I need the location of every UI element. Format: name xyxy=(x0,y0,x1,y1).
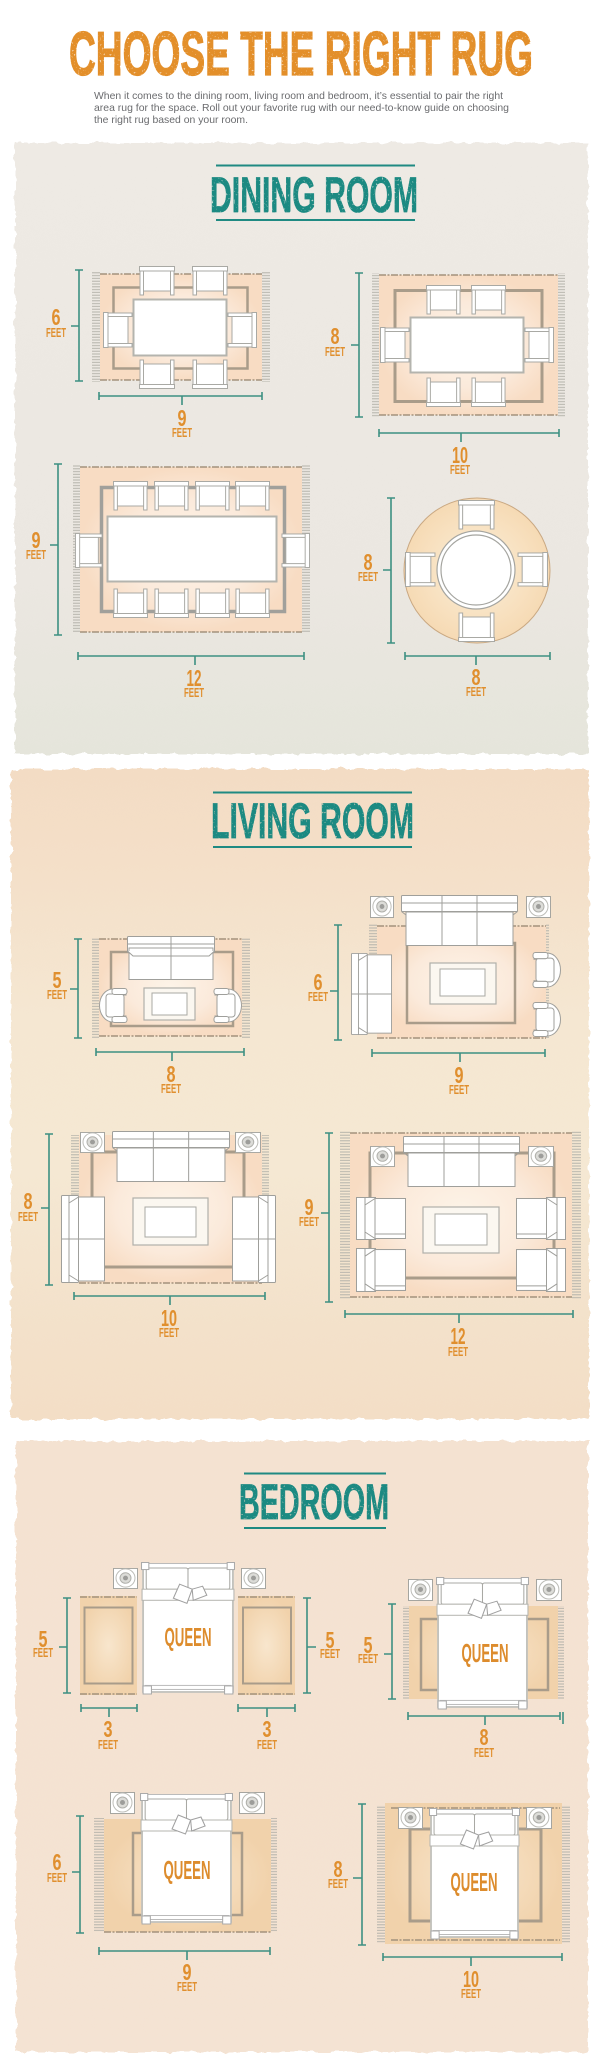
furniture xyxy=(62,1132,276,1282)
table and chairs xyxy=(104,266,256,388)
right width dimension: 3 feet xyxy=(238,1704,295,1752)
nightstands xyxy=(408,1580,561,1600)
rug xyxy=(92,272,270,382)
intro text xyxy=(94,91,509,126)
intro text: area rug for the space. Roll out your favorite rug with our need-to-know guide on choosing xyxy=(94,103,509,114)
rug xyxy=(340,1131,581,1299)
width dimension: 12 feet: 12 xyxy=(450,1323,466,1349)
height dimension: 8 feet: FEET xyxy=(325,345,345,359)
left width dimension: 3 feet xyxy=(81,1704,137,1752)
width dimension: 9 feet xyxy=(99,1947,270,1994)
height dimension: 8 feet: 8 xyxy=(364,549,373,575)
table and chairs xyxy=(380,286,554,406)
diagram: 5 by 8 living room rug xyxy=(47,936,250,1096)
height dimension: 5 feet xyxy=(358,1604,396,1699)
width dimension: 10 feet: 10 xyxy=(161,1305,177,1331)
width dimension: 10 feet: FEET xyxy=(450,463,470,477)
height dimension: 5 feet: 5 xyxy=(364,1632,373,1658)
rug xyxy=(94,1818,277,1932)
width dimension: 10 feet: 10 xyxy=(463,1966,479,1992)
width dimension: 9 feet: 9 xyxy=(454,1062,464,1088)
height dimension: 8 feet xyxy=(358,498,395,643)
width dimension: 10 feet: FEET xyxy=(159,1326,179,1340)
height dimension: 8 feet: 8 xyxy=(334,1856,343,1882)
height dimension: 6 feet: 6 xyxy=(314,969,322,995)
width dimension: 9 feet: 9 xyxy=(182,1959,192,1985)
rug xyxy=(73,465,310,633)
nightstands xyxy=(110,1792,264,1814)
diagram: bed with 8 by 10 rug xyxy=(328,1803,570,2001)
diagram: 8 by 10 living room rug xyxy=(18,1132,276,1340)
rug xyxy=(369,924,549,1038)
queen bed xyxy=(437,1578,528,1709)
width dimension: 10 feet xyxy=(379,429,559,477)
left width dimension: 3 feet: FEET xyxy=(98,1738,118,1752)
height dimension: 5 feet: 5 xyxy=(52,967,62,993)
nightstands xyxy=(398,1808,551,1828)
width dimension: 10 feet: 10 xyxy=(452,442,468,468)
width dimension: 12 feet xyxy=(78,652,304,700)
height dimension: 6 feet xyxy=(47,1816,84,1933)
width dimension: 9 feet: FEET xyxy=(172,426,192,440)
intro text: When it comes to the dining room, living room and bedroom, it’s essential to pair the right xyxy=(94,91,503,102)
right runner rug xyxy=(238,1596,295,1695)
queen bed xyxy=(142,1563,234,1694)
rug xyxy=(92,938,250,1038)
width dimension: 10 feet xyxy=(383,1953,562,2001)
queen bed: QUEEN xyxy=(164,1855,210,1885)
height dimension: 5 feet: FEET xyxy=(358,1652,378,1666)
furniture xyxy=(356,1136,566,1291)
heading: dining room: DINING ROOM xyxy=(210,167,418,223)
heading: bedroom: BEDROOM xyxy=(239,1474,389,1530)
diagram: 9 by 12 dining rug xyxy=(26,464,310,700)
right width dimension: 3 feet: 3 xyxy=(262,1716,272,1742)
height dimension: 8 feet: 8 xyxy=(24,1188,33,1214)
rug xyxy=(372,273,565,417)
height dimension: 6 feet: 6 xyxy=(52,1849,62,1875)
height dimension: 9 feet xyxy=(26,464,62,635)
height dimension: 9 feet xyxy=(299,1133,333,1302)
queen bed: QUEEN xyxy=(164,1622,212,1652)
panel: living room background xyxy=(11,769,589,1419)
width dimension: 10 feet xyxy=(74,1292,265,1340)
height dimension: 6 feet xyxy=(46,270,83,381)
left runner rug xyxy=(80,1596,137,1695)
height dimension: 5 feet xyxy=(47,939,82,1038)
height dimension: 8 feet: FEET xyxy=(358,570,378,584)
left height dimension: 5 feet: 5 xyxy=(38,1626,48,1652)
width dimension: 8 feet: FEET xyxy=(466,685,486,699)
right height dimension: 5 feet: FEET xyxy=(320,1647,340,1661)
queen bed: QUEEN xyxy=(450,1867,498,1897)
left height dimension: 5 feet: FEET xyxy=(33,1646,53,1660)
width dimension: 12 feet: FEET xyxy=(448,1345,468,1359)
height dimension: 8 feet xyxy=(18,1134,53,1285)
width dimension: 8 feet: FEET xyxy=(161,1082,181,1096)
height dimension: 8 feet xyxy=(328,1804,366,1945)
height dimension: 6 feet: 6 xyxy=(52,304,60,330)
diagram: bed with 6 by 9 rug xyxy=(47,1792,277,1994)
height dimension: 6 feet xyxy=(308,925,342,1040)
queen bed xyxy=(430,1808,519,1939)
width dimension: 8 feet: 8 xyxy=(480,1724,489,1750)
rug xyxy=(71,1135,269,1283)
rug xyxy=(377,1803,570,1944)
height dimension: 6 feet: FEET xyxy=(308,990,328,1004)
width dimension: 8 feet: 8 xyxy=(472,664,481,690)
height dimension: 9 feet: 9 xyxy=(304,1194,314,1220)
diagram: bed with 5 by 8 rug xyxy=(358,1578,564,1760)
width dimension: 12 feet: 12 xyxy=(186,665,202,691)
height dimension: 6 feet: FEET xyxy=(46,326,66,340)
width dimension: 9 feet: 9 xyxy=(178,405,186,431)
height dimension: 9 feet: FEET xyxy=(26,548,46,562)
intro text: the right rug based on your room. xyxy=(94,115,248,126)
width dimension: 10 feet: FEET xyxy=(461,1987,481,2001)
heading: living room: LIVING ROOM xyxy=(211,793,414,849)
width dimension: 8 feet: FEET xyxy=(474,1746,494,1760)
width dimension: 8 feet: 8 xyxy=(166,1061,176,1087)
width dimension: 12 feet xyxy=(345,1310,573,1359)
width dimension: 8 feet xyxy=(96,1048,244,1096)
height dimension: 8 feet: FEET xyxy=(18,1210,38,1224)
diagram: 6 by 9 dining rug xyxy=(46,266,270,440)
height dimension: 8 feet: 8 xyxy=(330,323,340,349)
height dimension: 9 feet: 9 xyxy=(32,527,40,553)
furniture xyxy=(100,936,242,1022)
panel: bedroom background xyxy=(16,1441,588,2052)
table and chairs xyxy=(75,482,310,618)
round table and chairs xyxy=(406,500,547,642)
panel: dining room background xyxy=(15,143,588,754)
round rug xyxy=(404,498,550,643)
width dimension: 8 feet xyxy=(405,652,550,699)
left width dimension: 3 feet: 3 xyxy=(104,1716,112,1742)
heading: living room xyxy=(211,792,414,849)
width dimension: 9 feet xyxy=(372,1049,545,1097)
width dimension: 9 feet: FEET xyxy=(177,1980,197,1994)
width dimension: 9 feet: FEET xyxy=(449,1083,469,1097)
height dimension: 6 feet: FEET xyxy=(47,1871,67,1885)
diagram: 6 by 9 living room rug xyxy=(308,896,560,1097)
right height dimension: 5 feet: 5 xyxy=(326,1627,335,1653)
height dimension: 5 feet: FEET xyxy=(47,988,67,1002)
furniture xyxy=(351,896,560,1036)
diagram: 9 by 12 living room rug xyxy=(299,1131,581,1359)
height dimension: 8 feet xyxy=(325,273,363,417)
width dimension: 9 feet xyxy=(99,392,262,440)
rug xyxy=(403,1606,564,1699)
diagram: bed with two 3 by 5 runner rugs xyxy=(33,1563,340,1752)
diagram: 8 foot round dining rug xyxy=(358,498,550,699)
queen bed xyxy=(141,1794,232,1924)
right height dimension: 5 feet xyxy=(303,1598,340,1693)
diagram: 8 by 10 dining rug xyxy=(325,273,565,477)
left height dimension: 5 feet xyxy=(33,1598,71,1693)
height dimension: 9 feet: FEET xyxy=(299,1215,319,1229)
width dimension: 12 feet: FEET xyxy=(184,686,204,700)
heading: bedroom xyxy=(239,1474,389,1530)
heading: dining room xyxy=(210,166,418,223)
height dimension: 8 feet: FEET xyxy=(328,1877,348,1891)
right width dimension: 3 feet: FEET xyxy=(257,1738,277,1752)
width dimension: 8 feet xyxy=(408,1712,563,1760)
queen bed: QUEEN xyxy=(462,1638,508,1668)
nightstands xyxy=(114,1568,266,1589)
